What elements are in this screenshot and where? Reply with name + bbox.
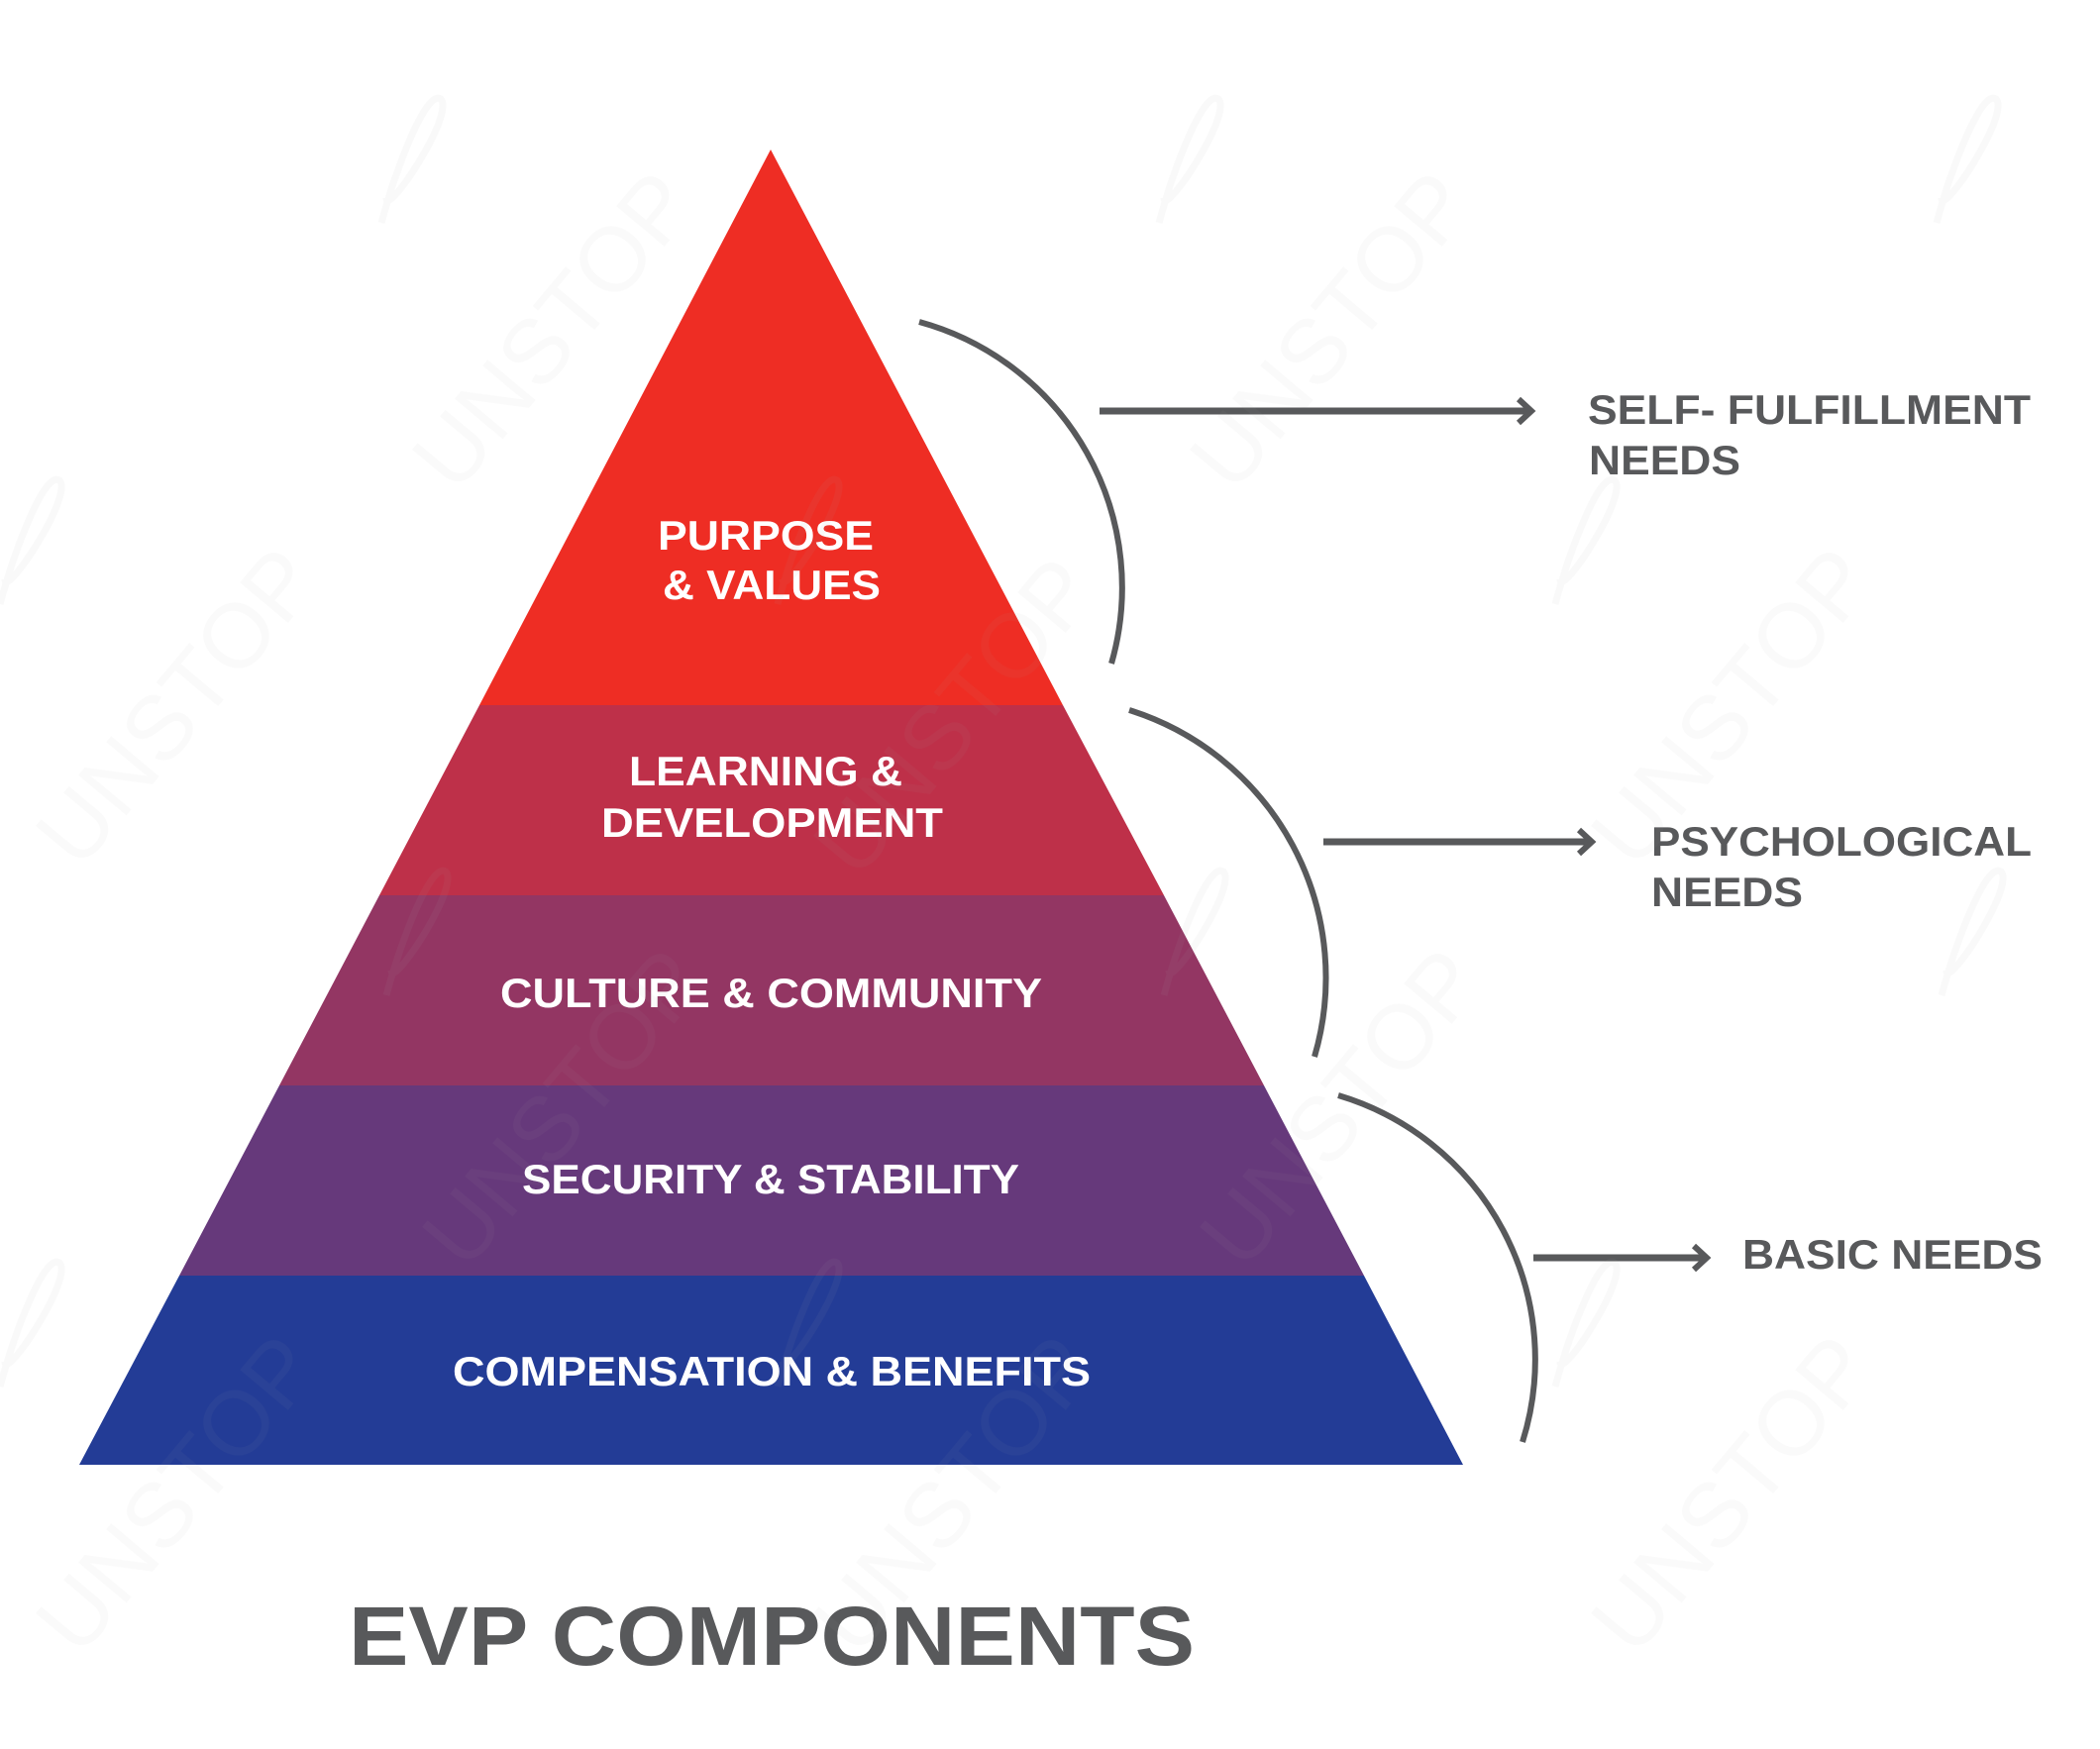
label: learning and development (601, 748, 943, 846)
label: self-fulfillment needs (1588, 386, 2031, 483)
label: compensation and benefits: COMPENSATION & BENEFITS (453, 1348, 1091, 1394)
watermark: UNSTOP (403, 931, 724, 1286)
label: security and stability: SECURITY & STABILITY (522, 1156, 1019, 1202)
watermark: UNSTOP (1572, 1317, 1893, 1672)
label: purpose and values: & VALUES (663, 562, 881, 608)
label: psychological needs: NEEDS (1651, 869, 1803, 915)
label: culture and community: CULTURE & COMMUNITY (500, 970, 1042, 1016)
layer: compensation and benefits (79, 1276, 1463, 1465)
label: learning and development: LEARNING & (629, 748, 902, 794)
bracket arc: psychological (1129, 710, 1326, 1057)
pyramid (79, 150, 1463, 1465)
layer: culture and community (279, 895, 1264, 1085)
watermark: UNSTOP (17, 1317, 338, 1672)
label: purpose and values: PURPOSE (658, 512, 874, 559)
label: basic needs: BASIC NEEDS (1742, 1231, 2043, 1278)
watermark: UNSTOP (794, 540, 1115, 894)
label: learning and development: DEVELOPMENT (601, 799, 943, 846)
watermark: UNSTOP (17, 530, 338, 884)
watermark: UNSTOP (1572, 530, 1893, 884)
label: purpose and values (658, 512, 881, 608)
watermark: UNSTOP (1171, 154, 1492, 508)
arrow: basic (1533, 1246, 1707, 1270)
bracket arc: self-fulfillment (919, 322, 1122, 664)
bracket arc: basic (1338, 1095, 1535, 1442)
label: self-fulfillment needs: NEEDS (1589, 437, 1740, 483)
watermark: UNSTOP (1181, 931, 1502, 1286)
label: self-fulfillment needs: SELF- FULFILLMENT (1588, 386, 2031, 433)
label: psychological needs (1651, 818, 2032, 915)
watermark: UNSTOP (794, 1317, 1115, 1672)
title: EVP COMPONENTS (349, 1590, 1195, 1683)
layer: learning and development (379, 705, 1164, 895)
arrow: psychological (1323, 830, 1592, 854)
watermark: UNSTOP (393, 154, 714, 508)
arrow: self-fulfillment (1100, 399, 1531, 423)
label: psychological needs: PSYCHOLOGICAL (1651, 818, 2032, 865)
layer: purpose and values (479, 150, 1063, 705)
layer: security and stability (179, 1085, 1364, 1276)
